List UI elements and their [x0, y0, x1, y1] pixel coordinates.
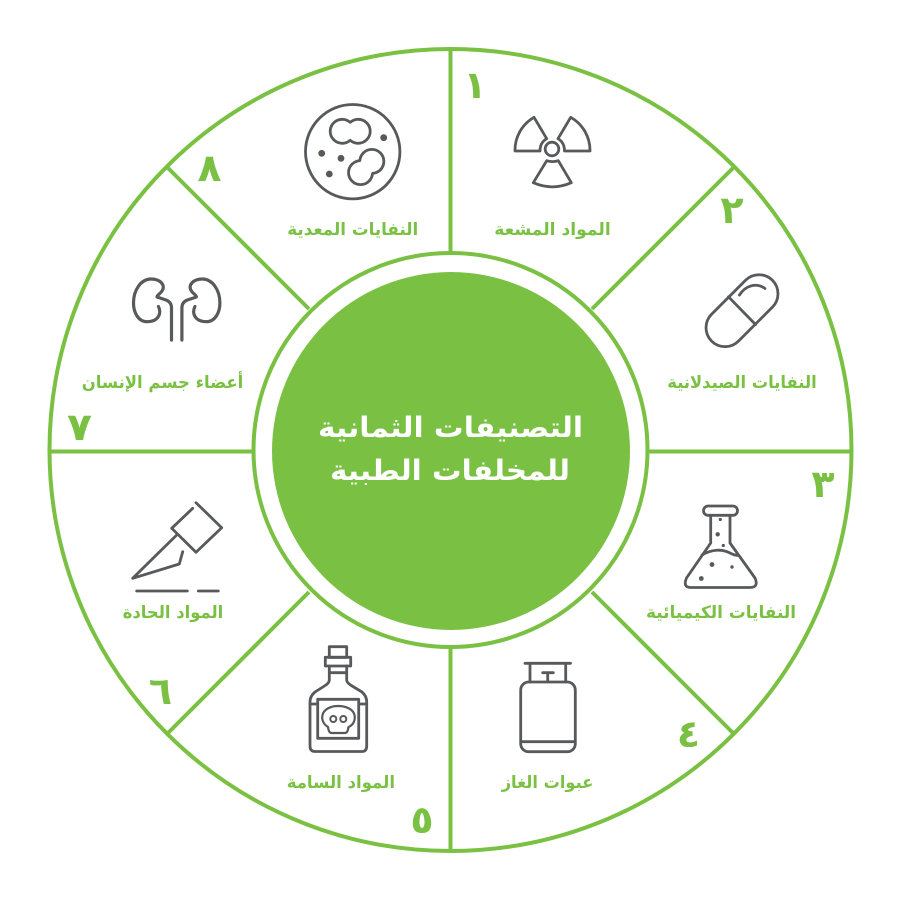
icon: petri dish — [306, 104, 400, 199]
center disc with title — [272, 272, 630, 630]
icon: poison bottle — [310, 647, 367, 752]
segment 8: infectious waste — [198, 104, 418, 240]
segment 1: radioactive materials — [463, 63, 611, 240]
icon: radiation — [515, 117, 590, 187]
title line 1: التصنيفات الثمانية — [318, 411, 583, 444]
segment 4: gas cylinders — [501, 663, 700, 793]
number 2: ٢ — [720, 188, 744, 232]
number 7: ٧ — [67, 405, 92, 449]
title line 2: للمخلفات الطبية — [330, 454, 570, 487]
label: النفايات الكيميائية — [646, 603, 796, 623]
icon: flask — [685, 506, 756, 588]
icon: capsule — [698, 267, 786, 355]
number 1: ١ — [463, 63, 487, 107]
number 3: ٣ — [811, 462, 835, 506]
label: عبوات الغاز — [501, 773, 593, 793]
segment 2: pharmaceutical waste — [667, 188, 817, 393]
flask bubbles — [699, 518, 734, 581]
number 8: ٨ — [198, 146, 222, 190]
label: النفايات المعدية — [287, 220, 418, 240]
label: المواد الحادة — [123, 603, 223, 623]
segment 5: toxic materials — [287, 647, 434, 842]
label: المواد السامة — [287, 773, 395, 793]
segment 3: chemical waste — [646, 462, 835, 623]
icon: kidneys — [134, 279, 220, 340]
number 4: ٤ — [677, 712, 700, 756]
label: النفايات الصيدلانية — [667, 373, 817, 393]
number 6: ٦ — [149, 669, 172, 713]
segment 7: human body organs — [67, 279, 243, 449]
wheel: outer circle and spokes — [50, 49, 852, 851]
number 5: ٥ — [410, 798, 434, 842]
label: المواد المشعة — [494, 220, 611, 240]
icon: scalpel — [133, 503, 222, 591]
segment 6: sharps — [123, 503, 223, 713]
label: أعضاء جسم الإنسان — [82, 371, 243, 393]
icon: gas cylinder — [521, 663, 575, 752]
petri dish spots — [318, 134, 387, 177]
